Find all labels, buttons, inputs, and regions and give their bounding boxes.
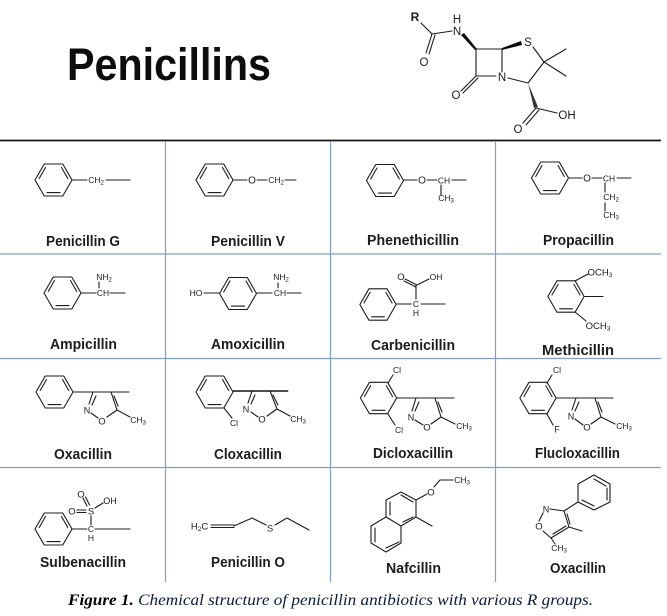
cell: Penicillin V: Penicillin V — [211, 234, 285, 250]
table grid — [0, 140, 661, 582]
cell: Dicloxacillin — [360, 365, 472, 462]
cell: Cloxacillin: N — [243, 404, 249, 414]
cell: Cloxacillin: O — [258, 414, 266, 426]
cell: Cloxacillin — [196, 376, 306, 463]
cell: Dicloxacillin: Dicloxacillin — [373, 446, 453, 462]
cell: Dicloxacillin: 3 — [468, 426, 472, 432]
cell: Penicillin G: CH — [88, 175, 100, 185]
cell: Flucloxacillin: 3 — [628, 426, 632, 432]
cell: Penicillin O: Penicillin O — [211, 555, 285, 571]
cell: Amoxicillin: CH — [274, 288, 286, 298]
figure caption: Figure 1. Chemical structure of penicillin antibiotics with various R groups. — [67, 592, 593, 609]
cell: Ampicillin — [44, 272, 125, 353]
title: Penicillins — [67, 39, 271, 90]
cell: Sulbenacillin: O — [77, 490, 85, 500]
cell: Propacillin: 2 — [615, 198, 619, 204]
cell: Flucloxacillin: O — [583, 422, 591, 434]
cell: Carbenicillin — [360, 272, 455, 354]
cell: Sulbenacillin: O — [68, 506, 76, 518]
cell: Ampicillin: 2 — [108, 278, 112, 284]
cell: Penicillin G: 2 — [100, 180, 104, 186]
cell: Cloxacillin: Cl — [230, 418, 238, 428]
cell: Flucloxacillin: Flucloxacillin — [535, 446, 620, 462]
cell: Amoxicillin: NH — [273, 272, 285, 282]
cell: Penicillin V: 2 — [280, 180, 284, 186]
cell: Phenethicillin: CH — [438, 193, 450, 203]
cell: Nafcillin — [371, 475, 470, 577]
cell: Oxacillin (row 4): Oxacillin — [550, 561, 606, 577]
cell: Oxacillin (row 3): N — [84, 406, 90, 416]
core penicillin structure with R group: OH — [558, 110, 576, 122]
cell: Methicillin: 3 — [609, 272, 613, 279]
core penicillin structure with R group: S — [524, 37, 532, 49]
cell: Oxacillin (row 4): N — [543, 504, 549, 514]
cell: Carbenicillin: OH — [430, 272, 442, 282]
cell: Nafcillin: O — [427, 488, 435, 498]
cell: Phenethicillin: Phenethicillin — [367, 233, 459, 249]
cell: Penicillin V: O — [248, 176, 256, 186]
cell: Sulbenacillin: Sulbenacillin — [40, 555, 126, 571]
cell: Oxacillin (row 4) — [535, 475, 610, 577]
cell: Dicloxacillin: O — [423, 422, 431, 434]
cell: Propacillin: CH — [603, 192, 615, 202]
cell: Flucloxacillin: CH — [616, 421, 628, 431]
cell: Penicillin G — [35, 164, 130, 250]
cell: Oxacillin (row 3) — [36, 376, 146, 463]
cell: Oxacillin (row 3): Oxacillin — [54, 447, 112, 463]
cell: Penicillin O: 2 — [198, 526, 202, 533]
core penicillin structure with R group — [411, 10, 576, 136]
cell: Ampicillin: NH — [96, 272, 108, 282]
cell: Sulbenacillin: H — [88, 533, 94, 543]
cell: Propacillin: Propacillin — [543, 233, 614, 249]
core penicillin structure with R group: O — [514, 124, 523, 136]
cell: Oxacillin (row 4): 3 — [563, 548, 567, 554]
cell: Oxacillin (row 3): CH — [130, 415, 142, 425]
cell: Dicloxacillin: Cl — [395, 425, 403, 435]
cell: Cloxacillin: 3 — [302, 420, 306, 426]
cell: Penicillin O: S — [267, 524, 273, 534]
cell: Methicillin: OCH — [586, 321, 607, 332]
core penicillin structure with R group: N — [498, 72, 506, 84]
core penicillin structure with R group: H — [453, 14, 461, 26]
cell: Dicloxacillin: Cl — [393, 365, 401, 375]
cell: Methicillin: Methicillin — [542, 343, 614, 359]
cell: Propacillin: CH — [603, 174, 615, 184]
cell: Propacillin: O — [583, 174, 591, 184]
cell: Penicillin O: H — [191, 522, 198, 532]
cell: Carbenicillin: O — [397, 272, 405, 283]
cell: Propacillin: CH — [603, 210, 615, 220]
cell: Cloxacillin: Cloxacillin — [214, 447, 282, 463]
cell: Penicillin V: CH — [268, 175, 280, 185]
cell: Amoxicillin: Amoxicillin — [211, 337, 285, 353]
cell: Oxacillin (row 4): O — [535, 522, 543, 532]
cell: Ampicillin: CH — [97, 288, 109, 298]
cell: Nafcillin: CH — [454, 475, 466, 485]
core penicillin structure with R group: R — [411, 10, 420, 24]
cell: Penicillin O: C — [201, 522, 208, 532]
cell: Flucloxacillin: Cl — [553, 365, 561, 375]
cell: Phenethicillin: 3 — [450, 198, 454, 204]
cell: Carbenicillin: C — [413, 299, 419, 309]
cell: Amoxicillin — [190, 272, 301, 353]
cell: Phenethicillin — [366, 164, 466, 249]
cell: Nafcillin: 3 — [466, 480, 470, 486]
core penicillin structure with R group: O — [452, 90, 461, 102]
cell: Cloxacillin: CH — [290, 414, 302, 424]
cell: Sulbenacillin: C — [88, 524, 94, 534]
core penicillin structure with R group: N — [453, 26, 461, 38]
cell: Carbenicillin: Carbenicillin — [371, 338, 455, 354]
cell: Sulbenacillin — [35, 490, 130, 571]
cell: Dicloxacillin: N — [408, 412, 414, 422]
cell: Flucloxacillin: N — [568, 412, 574, 422]
cell: Penicillin O — [191, 518, 309, 571]
cell: Penicillin V — [196, 164, 296, 250]
cell: Amoxicillin: HO — [190, 288, 203, 298]
cell: Phenethicillin: CH — [438, 176, 450, 186]
cell: Carbenicillin: H — [413, 308, 419, 318]
cell: Penicillin G: Penicillin G — [46, 234, 120, 250]
cell: Phenethicillin: O — [418, 176, 426, 186]
cell: Flucloxacillin: F — [554, 424, 560, 434]
cell: Sulbenacillin: S — [88, 506, 94, 518]
cell: Flucloxacillin — [520, 365, 632, 462]
cell: Propacillin: 3 — [615, 216, 619, 222]
core penicillin structure with R group: O — [420, 57, 429, 69]
cell: Sulbenacillin: OH — [103, 496, 117, 506]
cell: Methicillin: OCH — [588, 268, 609, 278]
cell: Dicloxacillin: CH — [456, 421, 468, 431]
cell: Propacillin — [532, 162, 631, 249]
cell: Oxacillin (row 3): O — [98, 416, 106, 428]
cell: Methicillin: 3 — [607, 326, 611, 332]
cell: Oxacillin (row 3): 3 — [142, 420, 146, 426]
cell: Oxacillin (row 4): CH — [551, 543, 563, 553]
cell: Amoxicillin: 2 — [285, 278, 289, 284]
cell: Ampicillin: Ampicillin — [50, 337, 117, 353]
cell: Methicillin — [542, 268, 614, 359]
cell: Nafcillin: Nafcillin — [386, 561, 441, 577]
